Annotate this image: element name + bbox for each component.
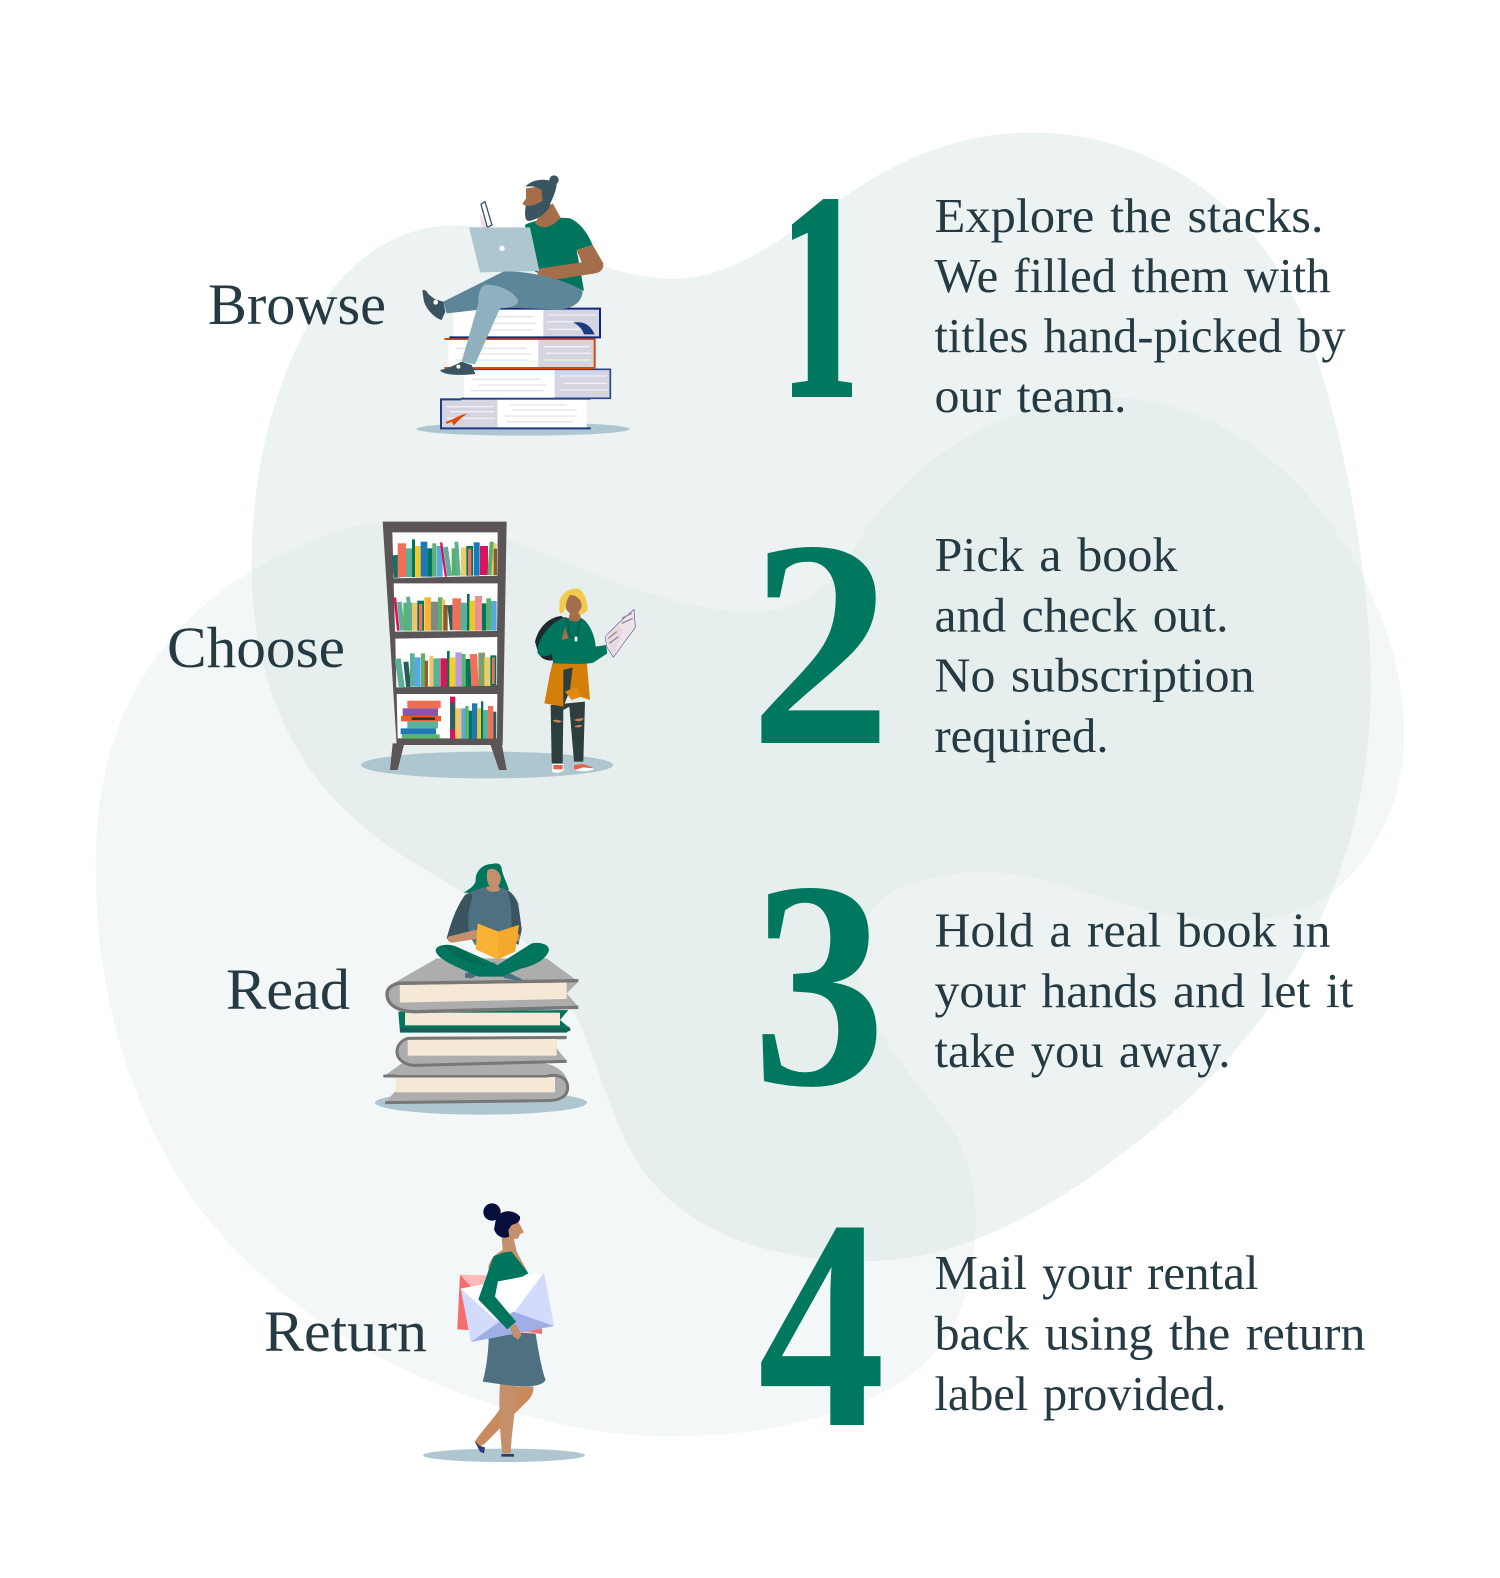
bookshelf (383, 522, 507, 770)
step 4 text: label provided. (934, 1368, 1226, 1421)
step 1 text: We filled them with (934, 250, 1330, 303)
shadow (375, 1091, 587, 1115)
step 2 text: No subscription (934, 650, 1254, 702)
bottom book (383, 1063, 568, 1103)
shadow (416, 422, 630, 436)
label: Choose: Choose (167, 615, 345, 680)
blue envelope (461, 1273, 554, 1342)
background blobs (96, 133, 1404, 1436)
number 3: 3 (752, 820, 886, 1148)
shadow (361, 752, 613, 778)
book stack (383, 958, 578, 1103)
top book (387, 958, 578, 1010)
step 2 text (934, 529, 1254, 763)
number 4: 4 (758, 1159, 885, 1491)
label: Browse: Browse (208, 272, 386, 337)
books: shelf 3 (395, 651, 496, 688)
number 1: 1 (766, 130, 874, 462)
head (483, 1203, 524, 1240)
label: Return: Return (264, 1299, 427, 1364)
background blob: upper right (252, 133, 1371, 1261)
books: shelf 4 (401, 697, 496, 739)
step 4 text: back using the return (934, 1308, 1366, 1360)
step 3 text: Hold a real book in (934, 904, 1330, 958)
step 1 text: titles hand-picked by (934, 310, 1346, 363)
books: shelf 2 (394, 594, 497, 631)
shadow (423, 1449, 585, 1462)
step 2 text: and check out. (934, 590, 1228, 642)
man (422, 175, 603, 375)
step 4 text (934, 1247, 1366, 1421)
illustration: woman reading on books (375, 863, 587, 1115)
legs (474, 1383, 533, 1457)
step 2 text: required. (934, 710, 1108, 763)
step 1 text: our team. (934, 370, 1126, 423)
label: Read: Read (226, 957, 350, 1022)
reading woman (436, 863, 549, 981)
skirt (483, 1330, 546, 1386)
background blob: lower left (96, 398, 1404, 1436)
step 1 text (934, 190, 1346, 423)
arm (478, 1255, 522, 1339)
book stack (441, 309, 610, 428)
step 3 text: take you away. (934, 1025, 1230, 1078)
green book (398, 1010, 570, 1033)
step 2 text: Pick a book (934, 529, 1178, 582)
step 3 text (934, 904, 1354, 1078)
step 4 text: Mail your rental (934, 1247, 1258, 1300)
books: shelf 1 (392, 539, 497, 578)
illustration: man with laptop on books (416, 175, 630, 436)
number 2: 2 (749, 479, 892, 807)
illustration: woman carrying envelopes (423, 1203, 585, 1462)
red envelope (457, 1275, 542, 1334)
background blob: overlap (96, 398, 1404, 1436)
phone (480, 202, 492, 228)
illustration: bookshelf and reader (361, 522, 635, 778)
step 3 text: your hands and let it (934, 965, 1354, 1018)
third book (398, 1037, 567, 1064)
reader with open book (535, 588, 635, 773)
torso (488, 1237, 528, 1290)
step 1 text: Explore the stacks. (934, 190, 1324, 243)
